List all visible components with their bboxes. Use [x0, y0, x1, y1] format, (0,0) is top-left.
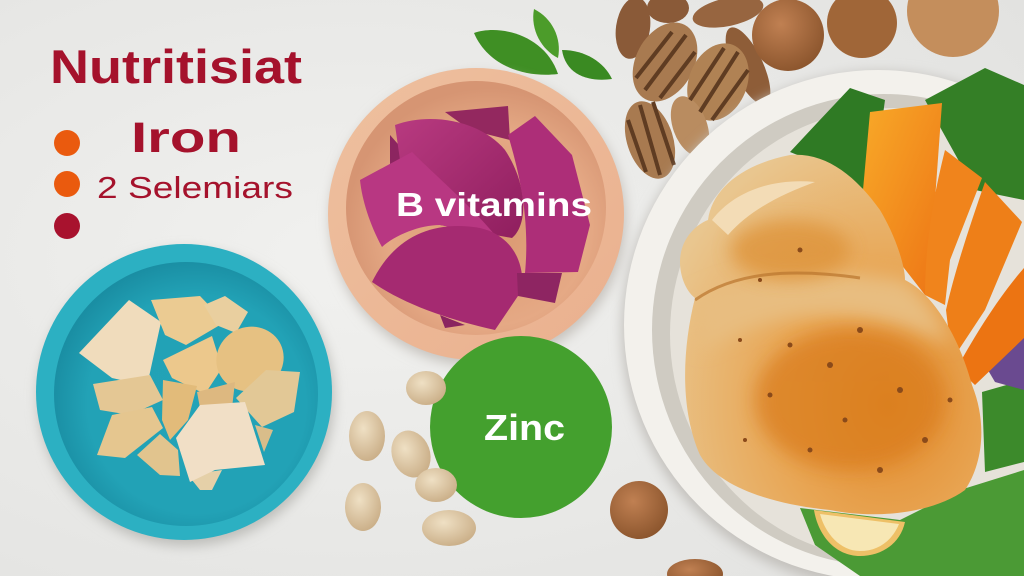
beet slices	[360, 106, 590, 330]
hazelnuts bottom	[610, 481, 723, 576]
carrot and squash wedges	[863, 103, 1024, 385]
pecans cluster	[612, 0, 779, 185]
text: B vitamins: B vitamins	[396, 186, 592, 223]
panel: plate with roast chicken and vegetables	[622, 68, 1024, 576]
hazelnuts top	[752, 0, 999, 71]
bullet dots	[54, 130, 80, 239]
roast chicken	[670, 150, 990, 525]
panel: teal bowl with chicken pieces	[36, 244, 334, 546]
lemon slice	[814, 510, 905, 556]
chicken pieces	[79, 296, 300, 490]
salad greens	[790, 68, 1024, 576]
badge: Zinc: Zinc	[484, 407, 565, 448]
heading: Nutritisiat: Nutritisiat	[50, 40, 302, 93]
heading: Iron: Iron	[131, 114, 241, 162]
icon: basil leaves	[474, 9, 612, 80]
panel: peach bowl with beets	[328, 68, 626, 366]
badge: Zinc	[430, 336, 612, 518]
almonds scattered	[345, 371, 476, 546]
text: 2 Selemiars: 2 Selemiars	[97, 170, 293, 205]
